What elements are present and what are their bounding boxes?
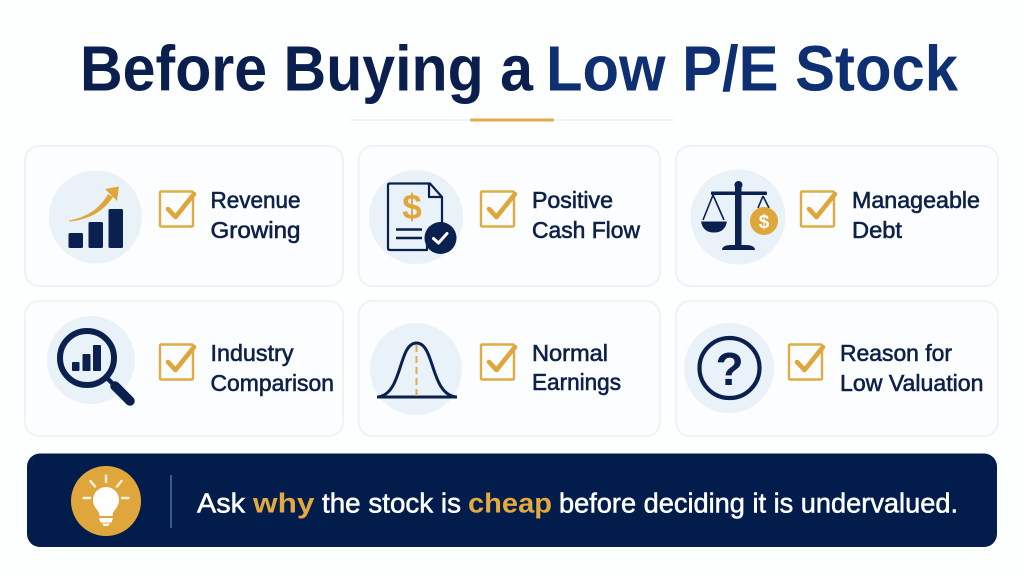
- checkbox: [801, 192, 835, 226]
- banner message: before deciding it is undervalued.: [559, 488, 958, 518]
- banner message: Ask: [197, 488, 246, 518]
- title underline: [350, 118, 674, 122]
- label: Normal: [532, 340, 608, 366]
- banner message: why: [252, 488, 315, 518]
- label: [852, 187, 980, 243]
- checkbox: [160, 192, 194, 226]
- label: Industry: [210, 340, 294, 366]
- takeaway banner: [27, 454, 997, 547]
- icon: bell curve: [370, 323, 462, 415]
- label: [532, 340, 621, 395]
- panel: industry comparison: [25, 301, 343, 436]
- checkbox: [481, 192, 515, 226]
- label: Comparison: [210, 370, 334, 396]
- title: [80, 32, 958, 104]
- title: Low P/E Stock: [546, 32, 958, 104]
- icon: light bulb: [71, 466, 141, 536]
- icon: balance scale with coin: $: [759, 212, 770, 233]
- label: Positive: [532, 187, 613, 213]
- label: [840, 340, 984, 396]
- label: [210, 187, 300, 243]
- checkbox: [481, 344, 515, 380]
- panel: reason for low valuation: [676, 301, 998, 436]
- panel: normal earnings: [358, 301, 660, 436]
- label: [532, 187, 640, 243]
- checkbox: [789, 344, 823, 380]
- label: Growing: [210, 217, 300, 243]
- icon: rising bar chart: [49, 170, 142, 264]
- label: Revenue: [210, 187, 300, 213]
- icon: question mark: [684, 323, 774, 413]
- label: Debt: [852, 217, 903, 243]
- label: [210, 340, 334, 396]
- icon: balance scale with coin: [690, 170, 786, 264]
- label: Reason for: [840, 340, 952, 366]
- banner message: the stock is: [322, 488, 461, 518]
- icon: document with check: [369, 170, 463, 264]
- label: Earnings: [532, 369, 621, 395]
- icon: magnifier over bars: [47, 316, 135, 404]
- panel: positive cash flow: [358, 146, 660, 286]
- banner message: [197, 488, 958, 518]
- checkbox: [160, 344, 194, 380]
- label: Low Valuation: [840, 370, 984, 396]
- panel: manageable debt: [676, 146, 998, 286]
- title: Before Buying a: [80, 32, 533, 104]
- icon: question mark: ?: [715, 343, 744, 395]
- panel: revenue growing: [25, 146, 343, 286]
- banner divider: [170, 475, 172, 528]
- banner message: cheap: [468, 488, 552, 518]
- label: Cash Flow: [532, 217, 640, 243]
- label: Manageable: [852, 187, 980, 213]
- icon: document with check: $: [402, 188, 422, 227]
